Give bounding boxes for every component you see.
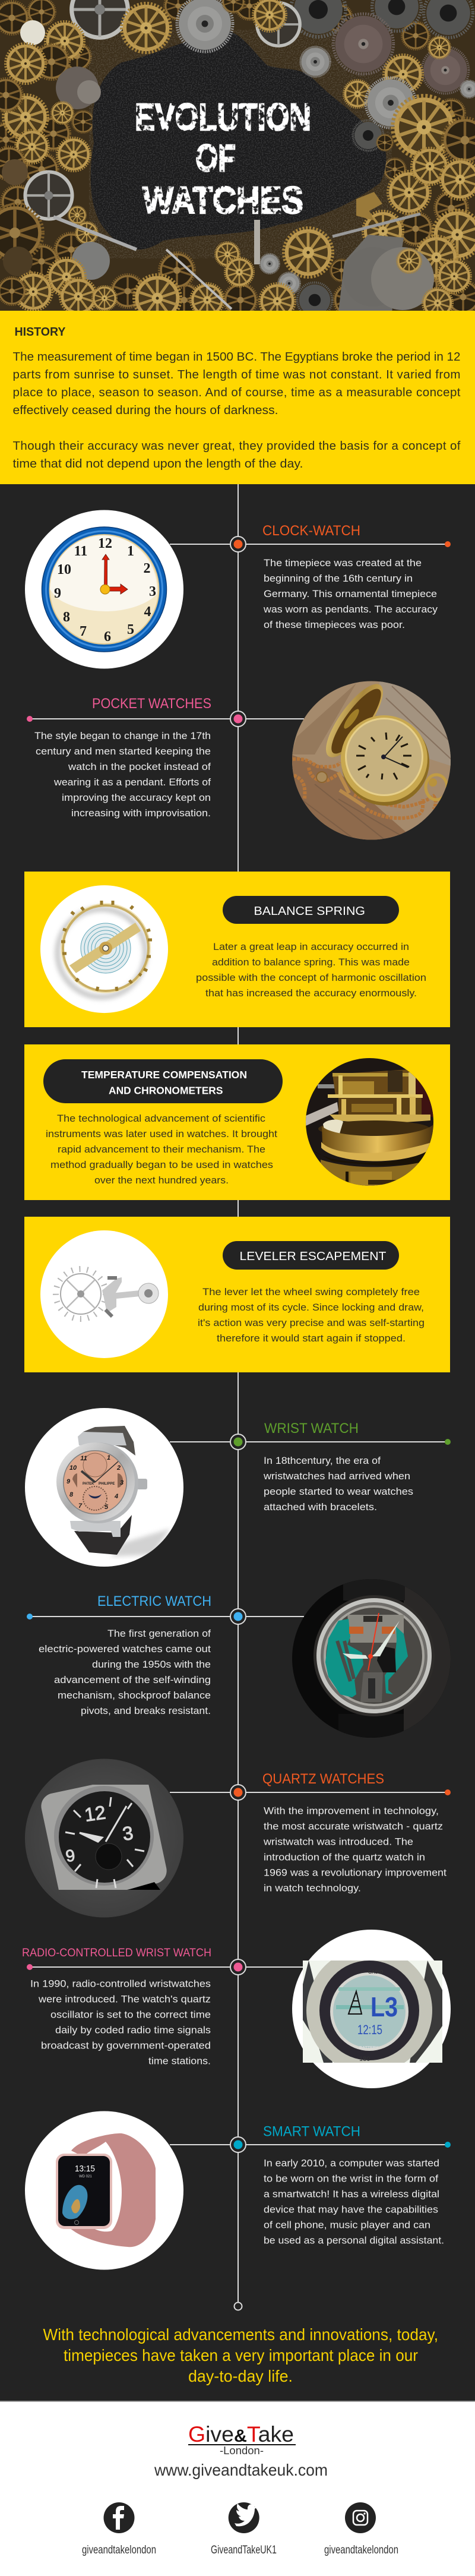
text: clock-watch: beginning of the 16th century in bbox=[264, 573, 413, 584]
panel: leveler escapement bbox=[24, 1217, 450, 1372]
handle: instagram: giveandtakelondon bbox=[324, 2544, 398, 2556]
text: pocket watches: The style began to change in the 17th bbox=[34, 730, 211, 741]
photo: wrist watch: 1 bbox=[107, 1454, 110, 1461]
text: leveler escapement: therefore it would start again if stopped. bbox=[217, 1333, 406, 1344]
pill: temperature compensation: TEMPERATURE COMPENSATION bbox=[81, 1069, 247, 1081]
teal board left bbox=[325, 1619, 363, 1697]
text: clock-watch: The timepiece was created at the bbox=[264, 557, 422, 569]
text: radio-controlled bbox=[30, 1978, 211, 2066]
text: wrist watch: In 18thcentury, the era of bbox=[264, 1455, 381, 1466]
fill gears behind bbox=[0, 0, 475, 317]
text: temperature compensation: rapid advancement to their mechanism. The bbox=[58, 1144, 265, 1155]
text: quartz watches: introduction of the quartz watch in bbox=[264, 1851, 425, 1863]
lower bridge bbox=[360, 1672, 383, 1702]
end dot bbox=[27, 716, 33, 722]
text: smart watch: of cell phone, music player and can bbox=[264, 2220, 430, 2230]
text: radio-controlled: broadcast by government-operated bbox=[41, 2040, 211, 2051]
text: smart watch: to be worn on the wrist in the form of bbox=[264, 2173, 438, 2184]
strap top bbox=[83, 1426, 135, 1456]
pill: temperature compensation bbox=[43, 1059, 283, 1103]
text: quartz watches: in watch technology. bbox=[264, 1882, 361, 1894]
panel: history bbox=[0, 311, 475, 484]
title: EVOLUTION bbox=[135, 96, 311, 138]
case bbox=[342, 735, 429, 806]
photo: radio-controlled watch: BATTERY bbox=[359, 2046, 379, 2050]
history text block: The measurement of time began in 1500 BC. The Egyptians broke the period in 12 bbox=[13, 350, 461, 364]
text: leveler escapement: The lever let the wheel swing completely free bbox=[202, 1287, 420, 1298]
illustration: wall clock: 12 bbox=[98, 536, 112, 551]
pill: balance spring: BALANCE SPRING bbox=[254, 905, 365, 918]
text: wrist watch bbox=[263, 1455, 413, 1513]
text: quartz watches: wristwatch was introduced. The bbox=[263, 1836, 413, 1848]
photo: wrist watch: 3 bbox=[120, 1479, 124, 1486]
text: radio-controlled: daily by coded radio time signals bbox=[55, 2025, 211, 2035]
centre black mass bbox=[377, 1646, 396, 1672]
coils bbox=[349, 1627, 363, 1634]
end dot bbox=[445, 2142, 451, 2148]
text: clock-watch: of these timepieces was poor. bbox=[264, 619, 405, 630]
text: temperature compensation: over the next hundred years. bbox=[94, 1175, 229, 1186]
node: quartz watches bbox=[230, 1785, 246, 1800]
upper movement bbox=[332, 1069, 411, 1094]
text: wrist watch: attached with bracelets. bbox=[264, 1501, 377, 1513]
history text block: place to place, season to season. And of course, time as a measurable concept bbox=[13, 386, 461, 399]
photo: wrist watch: 11 bbox=[80, 1455, 87, 1462]
timeline end ring bbox=[234, 2303, 242, 2310]
heading: quartz watches: QUARTZ WATCHES bbox=[262, 1771, 384, 1787]
logo: Give and Take London: Give&Take bbox=[188, 2422, 294, 2446]
text: clock-watch: Germany. This ornamental timepiece bbox=[264, 588, 437, 599]
node: electric watch bbox=[230, 1609, 246, 1624]
heading: smart watch: SMART WATCH bbox=[263, 2123, 360, 2140]
text: wrist watch: people started to wear watches bbox=[264, 1486, 413, 1497]
lower base bbox=[312, 1150, 426, 1166]
text: clock-watch: was worn as pendants. The accuracy bbox=[263, 604, 438, 615]
text: balance spring bbox=[196, 942, 426, 999]
text: balance spring: addition to balance spring. This was made bbox=[212, 957, 410, 968]
title: WATCHES bbox=[142, 179, 303, 222]
lugs bbox=[78, 1432, 126, 1445]
panel: quartz watches bbox=[24, 1757, 451, 1919]
photo: smart watch: 13:15 bbox=[75, 2164, 95, 2174]
handle: facebook: giveandtakelondon bbox=[82, 2544, 156, 2556]
text: temperature compensation: instruments was later used in watches. It brought bbox=[46, 1129, 277, 1139]
photo: wrist watch: PATEK bbox=[83, 1482, 94, 1486]
end dot bbox=[445, 1439, 451, 1445]
text: pocket watches bbox=[34, 730, 211, 819]
history text block: Though their accuracy was never great, they provided the basis for a concept of bbox=[13, 439, 461, 453]
photo: quartz watch: 9 bbox=[65, 1846, 76, 1865]
timeline spine bbox=[238, 484, 239, 2302]
title: OF bbox=[195, 137, 236, 179]
end dot bbox=[445, 541, 451, 547]
history text block: time that did not depend upon the length of the day. bbox=[13, 457, 303, 471]
text: electric watch: The first generation of bbox=[107, 1628, 211, 1639]
illustration: wall clock: 3 bbox=[149, 584, 156, 599]
illustration: wall clock: 11 bbox=[74, 544, 87, 559]
panel: smart watch bbox=[24, 2110, 451, 2272]
text: radio-controlled: time stations. bbox=[148, 2056, 211, 2066]
panel: clock-watch bbox=[25, 510, 451, 669]
illustration: wall clock: 8 bbox=[63, 610, 70, 625]
photo: smart watch bbox=[24, 2110, 185, 2272]
illustration: wall clock: 7 bbox=[80, 624, 87, 639]
text: electric watch: pivots, and breaks resistant. bbox=[81, 1705, 211, 1716]
photo: quartz watch: 3 bbox=[121, 1822, 135, 1845]
illustration: wall clock: 5 bbox=[127, 622, 134, 637]
panel: wrist watch bbox=[24, 1407, 451, 1568]
end dot bbox=[27, 1614, 33, 1620]
middle plate bbox=[328, 1094, 423, 1098]
photo: quartz watch bbox=[24, 1757, 185, 1919]
photo: wrist watch: 2 bbox=[116, 1464, 121, 1472]
website url: www.giveandtakeuk.com bbox=[154, 2461, 328, 2479]
base ring bbox=[322, 1125, 433, 1154]
text: clock-watch bbox=[263, 557, 438, 630]
text: smart watch: In early 2010, a computer was started bbox=[264, 2158, 439, 2168]
image: balance wheel bbox=[40, 885, 168, 1013]
icon: twitter bbox=[229, 2502, 259, 2533]
heading: wrist watch: WRIST WATCH bbox=[264, 1420, 359, 1437]
illustration: wall clock: 1 bbox=[127, 544, 134, 559]
logo: Give and Take London: -London- bbox=[220, 2445, 264, 2457]
text: leveler escapement bbox=[198, 1287, 425, 1344]
heading: clock-watch: CLOCK-WATCH bbox=[262, 523, 360, 539]
pill: leveler escapement: LEVELER ESCAPEMENT bbox=[240, 1250, 386, 1263]
history text block bbox=[13, 350, 461, 471]
photo: radio-controlled watch: CASIO bbox=[368, 1969, 383, 1975]
photo: wrist watch: 10 bbox=[69, 1464, 77, 1472]
base top bbox=[318, 1120, 430, 1137]
text: pocket watches: wearing it as a pendant. Efforts of bbox=[53, 776, 211, 788]
photo: wrist watch: 7 bbox=[78, 1502, 83, 1510]
node: radio-controlled bbox=[230, 1959, 246, 1975]
footer panel bbox=[0, 2401, 475, 2576]
photo: radio-controlled watch: L3 bbox=[370, 1991, 398, 2022]
text: pocket watches: watch in the pocket instead of bbox=[68, 761, 211, 772]
teal right bbox=[385, 1627, 408, 1694]
photo: wrist watch: 4 bbox=[114, 1493, 118, 1500]
photo: wrist watch: 9 bbox=[66, 1478, 71, 1485]
text: radio-controlled: oscillator is set to the correct time bbox=[50, 2009, 211, 2020]
text: balance spring: that has increased the accuracy enormously. bbox=[205, 988, 417, 999]
dark chalkboard centre bbox=[91, 31, 386, 250]
node: wrist watch bbox=[230, 1434, 246, 1450]
photo: gold pocket watch bbox=[291, 676, 452, 841]
hero: watch gears image with title bbox=[0, 0, 475, 321]
chain bbox=[293, 759, 436, 818]
text: quartz watches: 1969 was a revolutionary improvement bbox=[264, 1867, 446, 1879]
node: clock-watch bbox=[230, 536, 246, 552]
pill: leveler escapement bbox=[223, 1241, 399, 1270]
title bbox=[136, 102, 310, 214]
text: pocket watches: century and men started keeping the bbox=[36, 746, 211, 757]
upper plate bbox=[347, 1615, 404, 1643]
text: radio-controlled: were introduced. The watch's quartz bbox=[38, 1994, 211, 2004]
text: leveler escapement: during most of its cycle. Since locking and draw, bbox=[198, 1302, 424, 1313]
illustration: wall clock: 9 bbox=[54, 586, 61, 601]
logo: Give and Take London bbox=[188, 2422, 296, 2457]
closing statement: timepieces have taken a very important place in our bbox=[64, 2346, 418, 2365]
heading: electric watch: ELECTRIC WATCH bbox=[97, 1593, 211, 1609]
text: temperature compensation: method gradually began to be used in watches bbox=[50, 1160, 273, 1170]
panel: temperature compensation and chronometers bbox=[24, 1044, 450, 1200]
closing statement: day-to-day life. bbox=[188, 2367, 293, 2385]
closing statement bbox=[43, 2325, 438, 2385]
icon: facebook bbox=[103, 2502, 134, 2533]
text: electric watch bbox=[39, 1628, 211, 1716]
node: pocket watches bbox=[230, 711, 246, 727]
text: pocket watches: improving the accuracy kept on bbox=[62, 792, 211, 803]
crown bbox=[138, 1479, 147, 1489]
text: quartz watches: With the improvement in technology, bbox=[264, 1805, 439, 1817]
photo: wrist watch: 5 bbox=[104, 1504, 109, 1511]
end dot bbox=[27, 1964, 33, 1970]
photo: quartz watch: 12 bbox=[83, 1801, 107, 1826]
photo: radio-controlled watch: 180 bbox=[359, 2056, 370, 2063]
text: balance spring: possible with the concept of harmonic oscillation bbox=[196, 973, 426, 983]
text: radio-controlled: In 1990, radio-controlled wristwatches bbox=[30, 1978, 211, 1989]
text: smart watch: be used as a personal digital assistant. bbox=[264, 2235, 444, 2246]
illustration: wall clock bbox=[25, 510, 183, 669]
text: smart watch bbox=[264, 2158, 444, 2246]
image: lever escapement bbox=[40, 1230, 168, 1358]
crown and bow bbox=[429, 778, 437, 787]
text: temperature compensation bbox=[46, 1113, 277, 1186]
illustration: wall clock: 6 bbox=[104, 629, 111, 645]
node: smart watch bbox=[230, 2137, 246, 2152]
text: smart watch: a smartwatch! It has a wireless digital bbox=[264, 2189, 439, 2199]
text: electric watch: advancement of the self-winding bbox=[54, 1674, 211, 1685]
text: electric watch: during the 1950s with the bbox=[92, 1659, 211, 1670]
photo: wrist watch: PHILIPPE bbox=[99, 1482, 115, 1486]
heading: radio-controlled: RADIO-CONTROLLED WRIST WATCH bbox=[22, 1947, 211, 1959]
pill: temperature compensation: AND CHRONOMETERS bbox=[109, 1085, 223, 1097]
text: temperature compensation: The technological advancement of scientific bbox=[57, 1113, 265, 1124]
illustration: wall clock: 4 bbox=[144, 604, 151, 620]
photo: wrist watch: 8 bbox=[69, 1491, 74, 1498]
history text block: parts from sunrise to sunset. The length of time was not constant. It varied from bbox=[13, 368, 461, 381]
history text block: effectively ceased during the hours of darkness. bbox=[13, 403, 278, 417]
photo: smart watch: WD 021 bbox=[79, 2175, 92, 2179]
icon: instagram bbox=[345, 2502, 376, 2533]
text: smart watch: device that may have the capabilities bbox=[264, 2204, 438, 2215]
text: quartz watches bbox=[263, 1805, 446, 1894]
strap bottom bbox=[74, 1515, 132, 1555]
heading: pocket watches: POCKET WATCHES bbox=[92, 696, 211, 712]
text: quartz watches: the most accurate wristwatch - quartz bbox=[264, 1820, 443, 1832]
text: balance spring: Later a great leap in accuracy occurred in bbox=[213, 942, 409, 952]
text: pocket watches: increasing with improvisation. bbox=[71, 807, 211, 819]
illustration: wall clock: 10 bbox=[57, 562, 71, 577]
panel: radio-controlled wrist watch bbox=[22, 1930, 451, 2088]
heading: history: HISTORY bbox=[14, 326, 66, 339]
panel: balance spring bbox=[24, 872, 450, 1027]
end dot bbox=[445, 1789, 451, 1795]
hands bbox=[343, 1653, 368, 1659]
illustration: wall clock: 2 bbox=[144, 561, 151, 576]
panel: electric watch bbox=[27, 1578, 452, 1741]
text: electric watch: mechanism, shockproof balance bbox=[58, 1690, 211, 1701]
text: electric watch: electric-powered watches came out bbox=[39, 1643, 211, 1655]
closing statement: With technological advancements and innovations, today, bbox=[43, 2325, 438, 2344]
case bbox=[58, 1442, 138, 1523]
photo: radio-controlled watch: 12:15 bbox=[357, 2022, 382, 2037]
photo: wrist watch bbox=[24, 1407, 185, 1568]
photo: electric watch bbox=[291, 1578, 452, 1741]
handle: twitter: GiveandTakeUK1 bbox=[211, 2544, 277, 2556]
lid bbox=[326, 684, 383, 757]
pill: balance spring bbox=[223, 896, 399, 924]
text: leveler escapement: it's action was very precise and was self-starting bbox=[198, 1318, 425, 1328]
panel: pocket watches bbox=[27, 676, 452, 841]
photo: marine chronometer bbox=[306, 1058, 434, 1186]
photo: radio-controlled watch bbox=[292, 1930, 451, 2088]
text: wrist watch: wristwatches had arrived when bbox=[263, 1470, 410, 1482]
